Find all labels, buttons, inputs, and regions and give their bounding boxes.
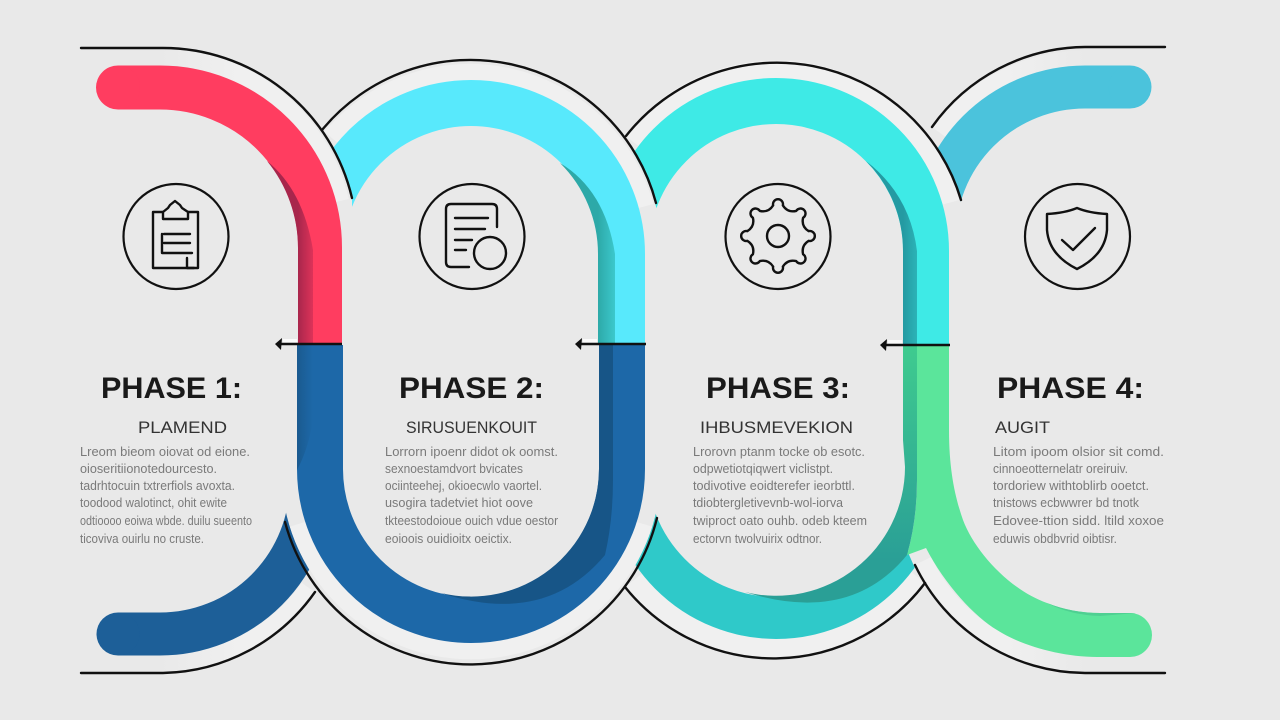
body text: phase 3: todivotive eoidterefer ieorbttl. <box>693 479 855 493</box>
icon: document with circle <box>420 184 524 289</box>
lower ribbon layer <box>96 344 1165 673</box>
body text: phase 4: Litom ipoom olsior sit comd. <box>993 445 1164 459</box>
body text: phase 2 <box>385 445 558 546</box>
arrow: phase 3 divider <box>880 339 950 351</box>
panel: phase 4 text <box>993 372 1164 546</box>
phase 2 lower band <box>297 345 634 640</box>
phase 2 upper band <box>320 83 635 345</box>
body text: phase 4: tordoriew withtoblirb ooetct. <box>993 479 1149 493</box>
body text: phase 3: ectorvn twolvuirix odtnor. <box>693 532 822 546</box>
body text: phase 4: Edovee-ttion sidd. ltild xoxoe <box>993 514 1164 528</box>
phase 4 upper band <box>938 66 1152 202</box>
subheading: phase 2: SIRUSUENKOUIT <box>406 419 537 437</box>
phase 2 upper arch backing <box>632 153 656 251</box>
body text: phase 2: Lorrorn ipoenr didot ok oomst. <box>385 445 558 459</box>
panel: phase 2 text <box>385 372 558 546</box>
body text: phase 1: toodood walotinct, ohit ewite <box>80 496 227 510</box>
heading: phase 1: PHASE 1: <box>101 372 242 405</box>
icon: gear <box>726 184 830 289</box>
heading: phase 4: PHASE 4: <box>997 372 1144 405</box>
phase 4 lower backing <box>898 468 926 568</box>
subheading: phase 3: IHBUSMEVEKION <box>700 419 853 437</box>
body text: phase 4: cinnoeotternelatr oreiruiv. <box>993 462 1128 476</box>
body text: phase 1: oioseritiionotedourcesto. <box>80 462 217 476</box>
body text: phase 4 <box>993 445 1164 546</box>
body text: phase 1: odtioooo eoiwa wbde. duilu sueento <box>80 514 252 528</box>
phase 4 lower band <box>907 345 1152 664</box>
body text: phase 2: eoioois ouidioitx oeictix. <box>385 532 512 546</box>
body text: phase 3: twiproct oato ouhb. odeb kteem <box>693 514 867 528</box>
arrow: phase 2 divider <box>575 338 646 350</box>
subheading: phase 4: AUGIT <box>995 419 1050 437</box>
icon: shield with check <box>1025 184 1130 289</box>
black outlines <box>81 47 1165 673</box>
body text: phase 2: sexnoestamdvort bvicates <box>385 462 523 476</box>
icon: clipboard <box>124 184 228 289</box>
body text: phase 3: Lrorovn ptanm tocke ob esotc. <box>693 445 865 459</box>
phase 1 upper band <box>96 57 340 345</box>
phase 3 lower shadow <box>745 345 917 603</box>
body text: phase 1 <box>80 445 252 546</box>
phase 2 lower backing <box>286 467 656 570</box>
upper ribbon layer <box>96 66 1152 344</box>
phase 3 upper band <box>626 79 941 345</box>
panel: phase 1 text <box>80 372 252 546</box>
body text: phase 1: ticoviva ouirlu no cruste. <box>80 532 204 546</box>
phase 1 lower band <box>96 512 310 656</box>
arrow: phase 1 divider <box>275 338 342 350</box>
body text: phase 3: tdiobtergletivevnb-wol-iorva <box>693 496 843 510</box>
body text: phase 3 <box>693 445 867 546</box>
phase 1 upper arch backing <box>297 149 352 254</box>
body text: phase 3: odpwetiotqiqwert viclistpt. <box>693 462 833 476</box>
body text: phase 2: tkteestodoioue ouich vdue oestor <box>385 514 558 528</box>
body text: phase 2: usogira tadetviet hiot oove <box>385 496 533 510</box>
panel: phase 3 text <box>693 372 867 546</box>
phase 3 upper arch backing <box>942 176 961 238</box>
body text: phase 4: tnistows ecbwwrer bd tnotk <box>993 496 1140 510</box>
body text: phase 4: eduwis obdbvrid oibtisr. <box>993 532 1117 546</box>
heading: phase 2: PHASE 2: <box>399 372 544 405</box>
subheading: phase 1: PLAMEND <box>138 419 227 437</box>
body text: phase 1: Lreom bieom oiovat od eione. <box>80 445 250 459</box>
phase 3 lower band <box>636 512 915 639</box>
heading: phase 3: PHASE 3: <box>706 372 850 405</box>
body text: phase 2: ociinteehej, okioecwlo vaortel. <box>385 479 542 493</box>
body text: phase 1: tadrhtocuin txtrerfiols avoxta. <box>80 479 235 493</box>
